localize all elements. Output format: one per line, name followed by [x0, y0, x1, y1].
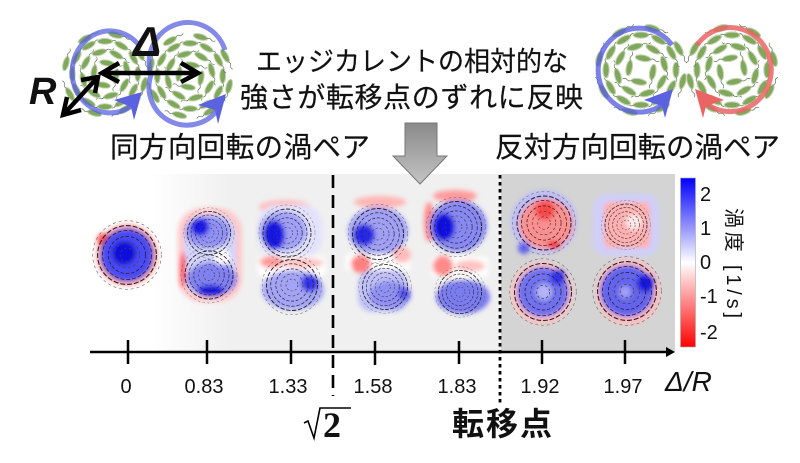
colorbar title: 渦度 [1/s]: [722, 208, 745, 318]
threshold: transition dotted line: [499, 175, 501, 406]
icon: counter-rotating vortex pair: [593, 22, 780, 118]
axis tick labels: 0: [120, 376, 132, 398]
heading: edge current text: [240, 47, 583, 113]
colorbar labels: 1: [700, 218, 711, 240]
colorbar labels: 0: [700, 252, 711, 274]
colorbar labels: -2: [700, 322, 718, 344]
axis with ticks: [90, 340, 675, 365]
panel: vorticity 1.97: [593, 194, 661, 325]
heading: edge current text: エッジカレントの相対的な: [256, 47, 568, 77]
label: sqrt 2: 2: [323, 405, 341, 445]
axis tick labels: 1.33: [269, 376, 307, 398]
panel: vorticity 1.92: [510, 190, 577, 325]
axis tick labels: 1.97: [604, 376, 642, 398]
background: co-rotating region: [150, 174, 501, 352]
axis title: Δ/R: [664, 366, 712, 397]
threshold: sqrt 2 dashed line: [332, 175, 334, 396]
heading: counter-rotating pair: 反対方向回転の渦ペア: [495, 132, 780, 164]
axis tick labels: [120, 376, 642, 398]
axis tick labels: 1.83: [438, 376, 476, 398]
label: R: R: [29, 71, 57, 113]
colorbar: [680, 178, 696, 347]
arrow: large down arrow: [393, 123, 447, 184]
panel: vorticity 0: [93, 221, 161, 289]
colorbar labels: 2: [700, 184, 711, 206]
panel: vorticity 1.33: [258, 200, 326, 315]
axis tick labels: 1.58: [354, 376, 392, 398]
label: transition point: 転移点: [452, 406, 552, 442]
colorbar labels: [700, 184, 718, 344]
icon: delta double arrow: [102, 63, 198, 82]
panel: vorticity 1.83: [424, 190, 490, 317]
heading: co-rotating pair: 同方向回転の渦ペア: [110, 132, 370, 164]
heading: edge current text: 強さが転移点のずれに反映: [240, 82, 583, 113]
background: counter-rotating region: [501, 174, 675, 352]
panel: vorticity 1.58: [346, 196, 411, 313]
axis tick labels: 1.92: [521, 376, 559, 398]
icon: co-rotating vortex pair: [60, 22, 235, 125]
label: sqrt 2: [304, 405, 351, 445]
colorbar labels: -1: [700, 286, 718, 308]
axis tick labels: 0.83: [185, 376, 223, 398]
icon: R double arrow: [63, 77, 98, 115]
label: delta: Δ: [131, 18, 161, 65]
panel: vorticity 0.83: [178, 208, 242, 303]
